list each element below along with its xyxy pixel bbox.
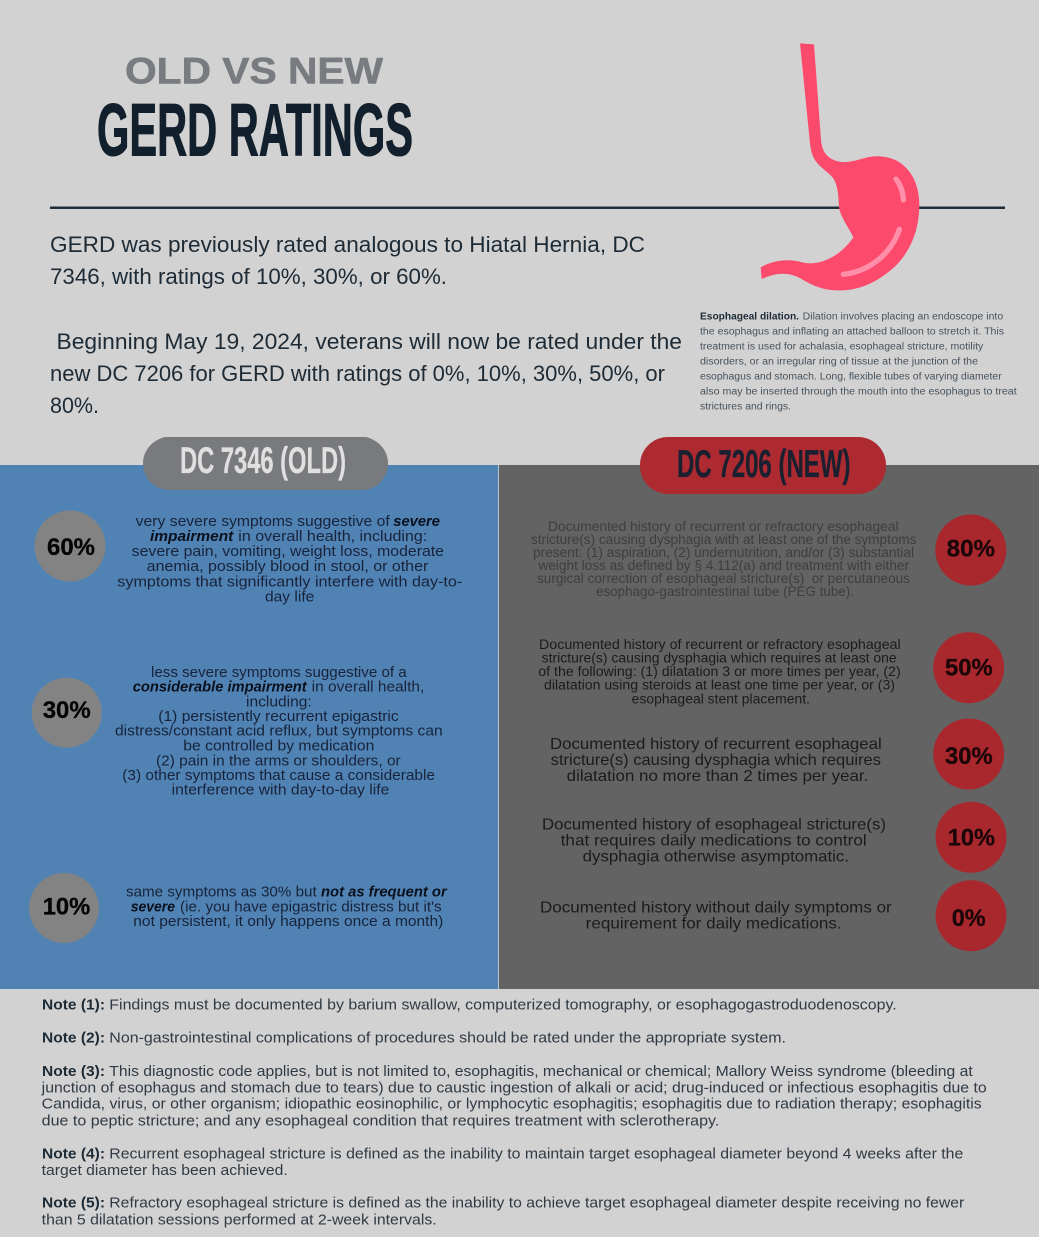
rating 80%: 80% [947, 536, 995, 563]
rating 30%: 30% [945, 743, 993, 770]
rating 50%: dilatation using steroids at least one time per year, or (3) [544, 677, 895, 692]
rating 80%: weight loss as defined by § 4.112(a) and treatment with either [537, 558, 909, 573]
old header pill: DC 7346 (OLD) [180, 440, 346, 481]
rating 80%: surgical correction of esophageal stricture(s) or percutaneous [537, 571, 910, 586]
rating 50%: esophageal stent placement. [632, 691, 810, 706]
rating 0%: Documented history without daily symptoms or [540, 900, 892, 917]
text block: esophageal dilation: Dilation involves placing an endoscope into [803, 312, 1004, 322]
rating 60% [34, 510, 462, 606]
panel: DC 7346 old [0, 437, 498, 989]
rating 60%: symptoms that significantly interfere with day-to- [117, 574, 462, 591]
rating 80%: esophago-gastrointestinal tube (PEG tube). [596, 584, 854, 599]
note 3 [41, 1063, 987, 1130]
rating 30%: (1) persistently recurrent epigastric [158, 708, 399, 725]
rating 10%: 10% [43, 894, 90, 920]
rating 30% [32, 664, 443, 799]
rating 10% [542, 802, 1006, 873]
rating 30%: dilatation no more than 2 times per year. [567, 768, 868, 785]
intro text [50, 232, 682, 418]
rating 60%: anemia, possibly blood in stool, or other [147, 558, 428, 575]
note 1: Note (1): [42, 996, 105, 1013]
title [97, 50, 413, 172]
rating 10%: 10% [948, 825, 995, 852]
text block: esophageal dilation [700, 312, 1017, 412]
text block: esophageal dilation: disorders, or an irregular ring of tissue at the junction of the [700, 356, 978, 368]
note 5: Note (5): [42, 1195, 105, 1212]
rating 30%: including: [246, 693, 312, 710]
rating 10%: that requires daily medications to control [561, 833, 867, 850]
rating 50% [538, 632, 1004, 706]
rating 30%: interference with day-to-day life [172, 782, 389, 799]
note 1: Findings must be documented by barium swallow, computerized tomography, or esophagogastroduodenoscopy. [109, 996, 897, 1013]
rating 0% [540, 880, 1006, 951]
text block: esophageal dilation: also may be inserted through the mouth into the esophagus to treat [700, 386, 1017, 398]
note 3: Candida, virus, or other organism; idiopathic eosinophilic, or lymphocytic esophagitis; esophagitis due to radiation therapy; esophagitis [42, 1096, 982, 1113]
new header pill: DC 7206 (NEW) [677, 443, 850, 486]
note 5: than 5 dilatation sessions performed at 2-week intervals. [42, 1211, 437, 1228]
note 3: junction of esophagus and stomach due to tears) due to caustic ingestion of alkali or acid; drug-induced or infectious esophagitis due to [41, 1079, 987, 1096]
notes [41, 996, 987, 1228]
rating 10%: not as frequent or [321, 884, 448, 901]
rating 10% [29, 873, 448, 943]
rating 50%: Documented history of recurrent or refractory esophageal [539, 637, 901, 652]
rating 10%: not persistent, it only happens once a month) [133, 913, 443, 930]
rating 50%: stricture(s) causing dysphagia which requires at least one [542, 650, 897, 665]
icon: stomach [761, 43, 919, 290]
rating 30%: less severe symptoms suggestive of a [151, 664, 407, 681]
rating 30% [550, 718, 1004, 790]
text block: esophageal dilation: strictures and rings. [700, 402, 791, 412]
intro text: 80%. [50, 393, 99, 418]
note 2: Non-gastrointestinal complications of procedures should be rated under the appropriate system. [109, 1030, 786, 1047]
note 2: Note (2): [42, 1030, 105, 1047]
rating 30%: considerable impairment [133, 678, 308, 696]
rating 30%: (2) pain in the arms or shoulders, or [156, 752, 401, 769]
rating 30%: distress/constant acid reflux, but symptoms can [115, 723, 443, 740]
intro text: 7346, with ratings of 10%, 30%, or 60%. [50, 264, 447, 289]
rating 10%: Documented history of esophageal stricture(s) [542, 817, 886, 834]
text block: esophageal dilation: Esophageal dilation. [700, 312, 799, 322]
rating 80%: present: (1) aspiration, (2) undernutrition, and/or (3) substantial [533, 545, 914, 560]
rating 10%: same symptoms as 30% but [126, 884, 318, 901]
note 4: Note (4): [42, 1146, 105, 1163]
rating 30%: be controlled by medication [183, 738, 374, 754]
note 4: target diameter has been achieved. [42, 1162, 288, 1179]
rating 30%: 30% [43, 697, 91, 724]
note 4 [42, 1146, 963, 1179]
note 5: Refractory esophageal stricture is defined as the inability to achieve target esophageal diameter despite receiving no fewer [109, 1195, 964, 1212]
note 4: Recurrent esophageal stricture is defined as the inability to maintain target esophageal diameter beyond 4 weeks after the [109, 1146, 963, 1163]
rating 30%: stricture(s) causing dysphagia which requires [551, 752, 881, 769]
rating 80% [531, 514, 1006, 599]
rating 80%: Documented history of recurrent or refractory esophageal [548, 519, 899, 534]
rating 60%: day life [265, 589, 314, 606]
old header pill [143, 437, 388, 490]
text block: esophageal dilation: treatment is used for achalasia, esophageal stricture, motility [700, 342, 983, 352]
rating 50%: of the following: (1) dilatation 3 or more times per year, (2) [538, 664, 901, 679]
rating 0%: requirement for daily medications. [586, 916, 842, 933]
rating 10%: severe [131, 899, 175, 916]
rating 60%: impairment [150, 528, 234, 545]
heading: GERD ratings: GERD RATINGS [97, 88, 413, 172]
note 3: Note (3): [42, 1063, 105, 1080]
text block: esophageal dilation: esophagus and stomach. Long, flexible tubes of varying diameter [700, 372, 1002, 382]
intro text: GERD was previously rated analogous to Hiatal Hernia, DC [50, 232, 645, 257]
heading: old vs new: OLD VS NEW [125, 50, 383, 91]
rating 60%: very severe symptoms suggestive of [136, 513, 391, 530]
panel: DC 7206 new [499, 437, 1039, 989]
rating 0%: 0% [952, 905, 986, 932]
new header pill [640, 437, 886, 494]
note 5 [42, 1195, 964, 1228]
rating 60%: in overall health, including: [238, 528, 427, 545]
rating 60%: severe pain, vomiting, weight loss, moderate [132, 543, 444, 560]
rating 10%: dysphagia otherwise asymptomatic. [583, 849, 849, 866]
rating 30%: (3) other symptoms that cause a considerable [122, 767, 435, 784]
rating 80%: stricture(s) causing dysphagia with at least one of the symptoms [531, 532, 917, 547]
rating 60%: severe [393, 513, 440, 530]
text block: esophageal dilation: the esophagus and inflating an attached balloon to stretch it. This [700, 326, 1004, 338]
note 3: This diagnostic code applies, but is not limited to, esophagitis, mechanical or chemical; Mallory Weiss syndrome (bleeding at [109, 1063, 974, 1080]
rating 50%: 50% [945, 655, 993, 682]
rating 30%: in overall health, [312, 678, 424, 696]
rating 60%: 60% [47, 534, 95, 561]
intro text: new DC 7206 for GERD with ratings of 0%, 10%, 30%, 50%, or [50, 361, 665, 386]
rating 30%: Documented history of recurrent esophageal [550, 736, 882, 753]
intro text: Beginning May 19, 2024, veterans will now be rated under the [56, 329, 682, 354]
note 3: due to peptic stricture; and any esophageal condition that requires treatment with sclerotherapy. [42, 1113, 719, 1130]
rating 10%: (ie. you have epigastric distress but it's [180, 899, 442, 916]
